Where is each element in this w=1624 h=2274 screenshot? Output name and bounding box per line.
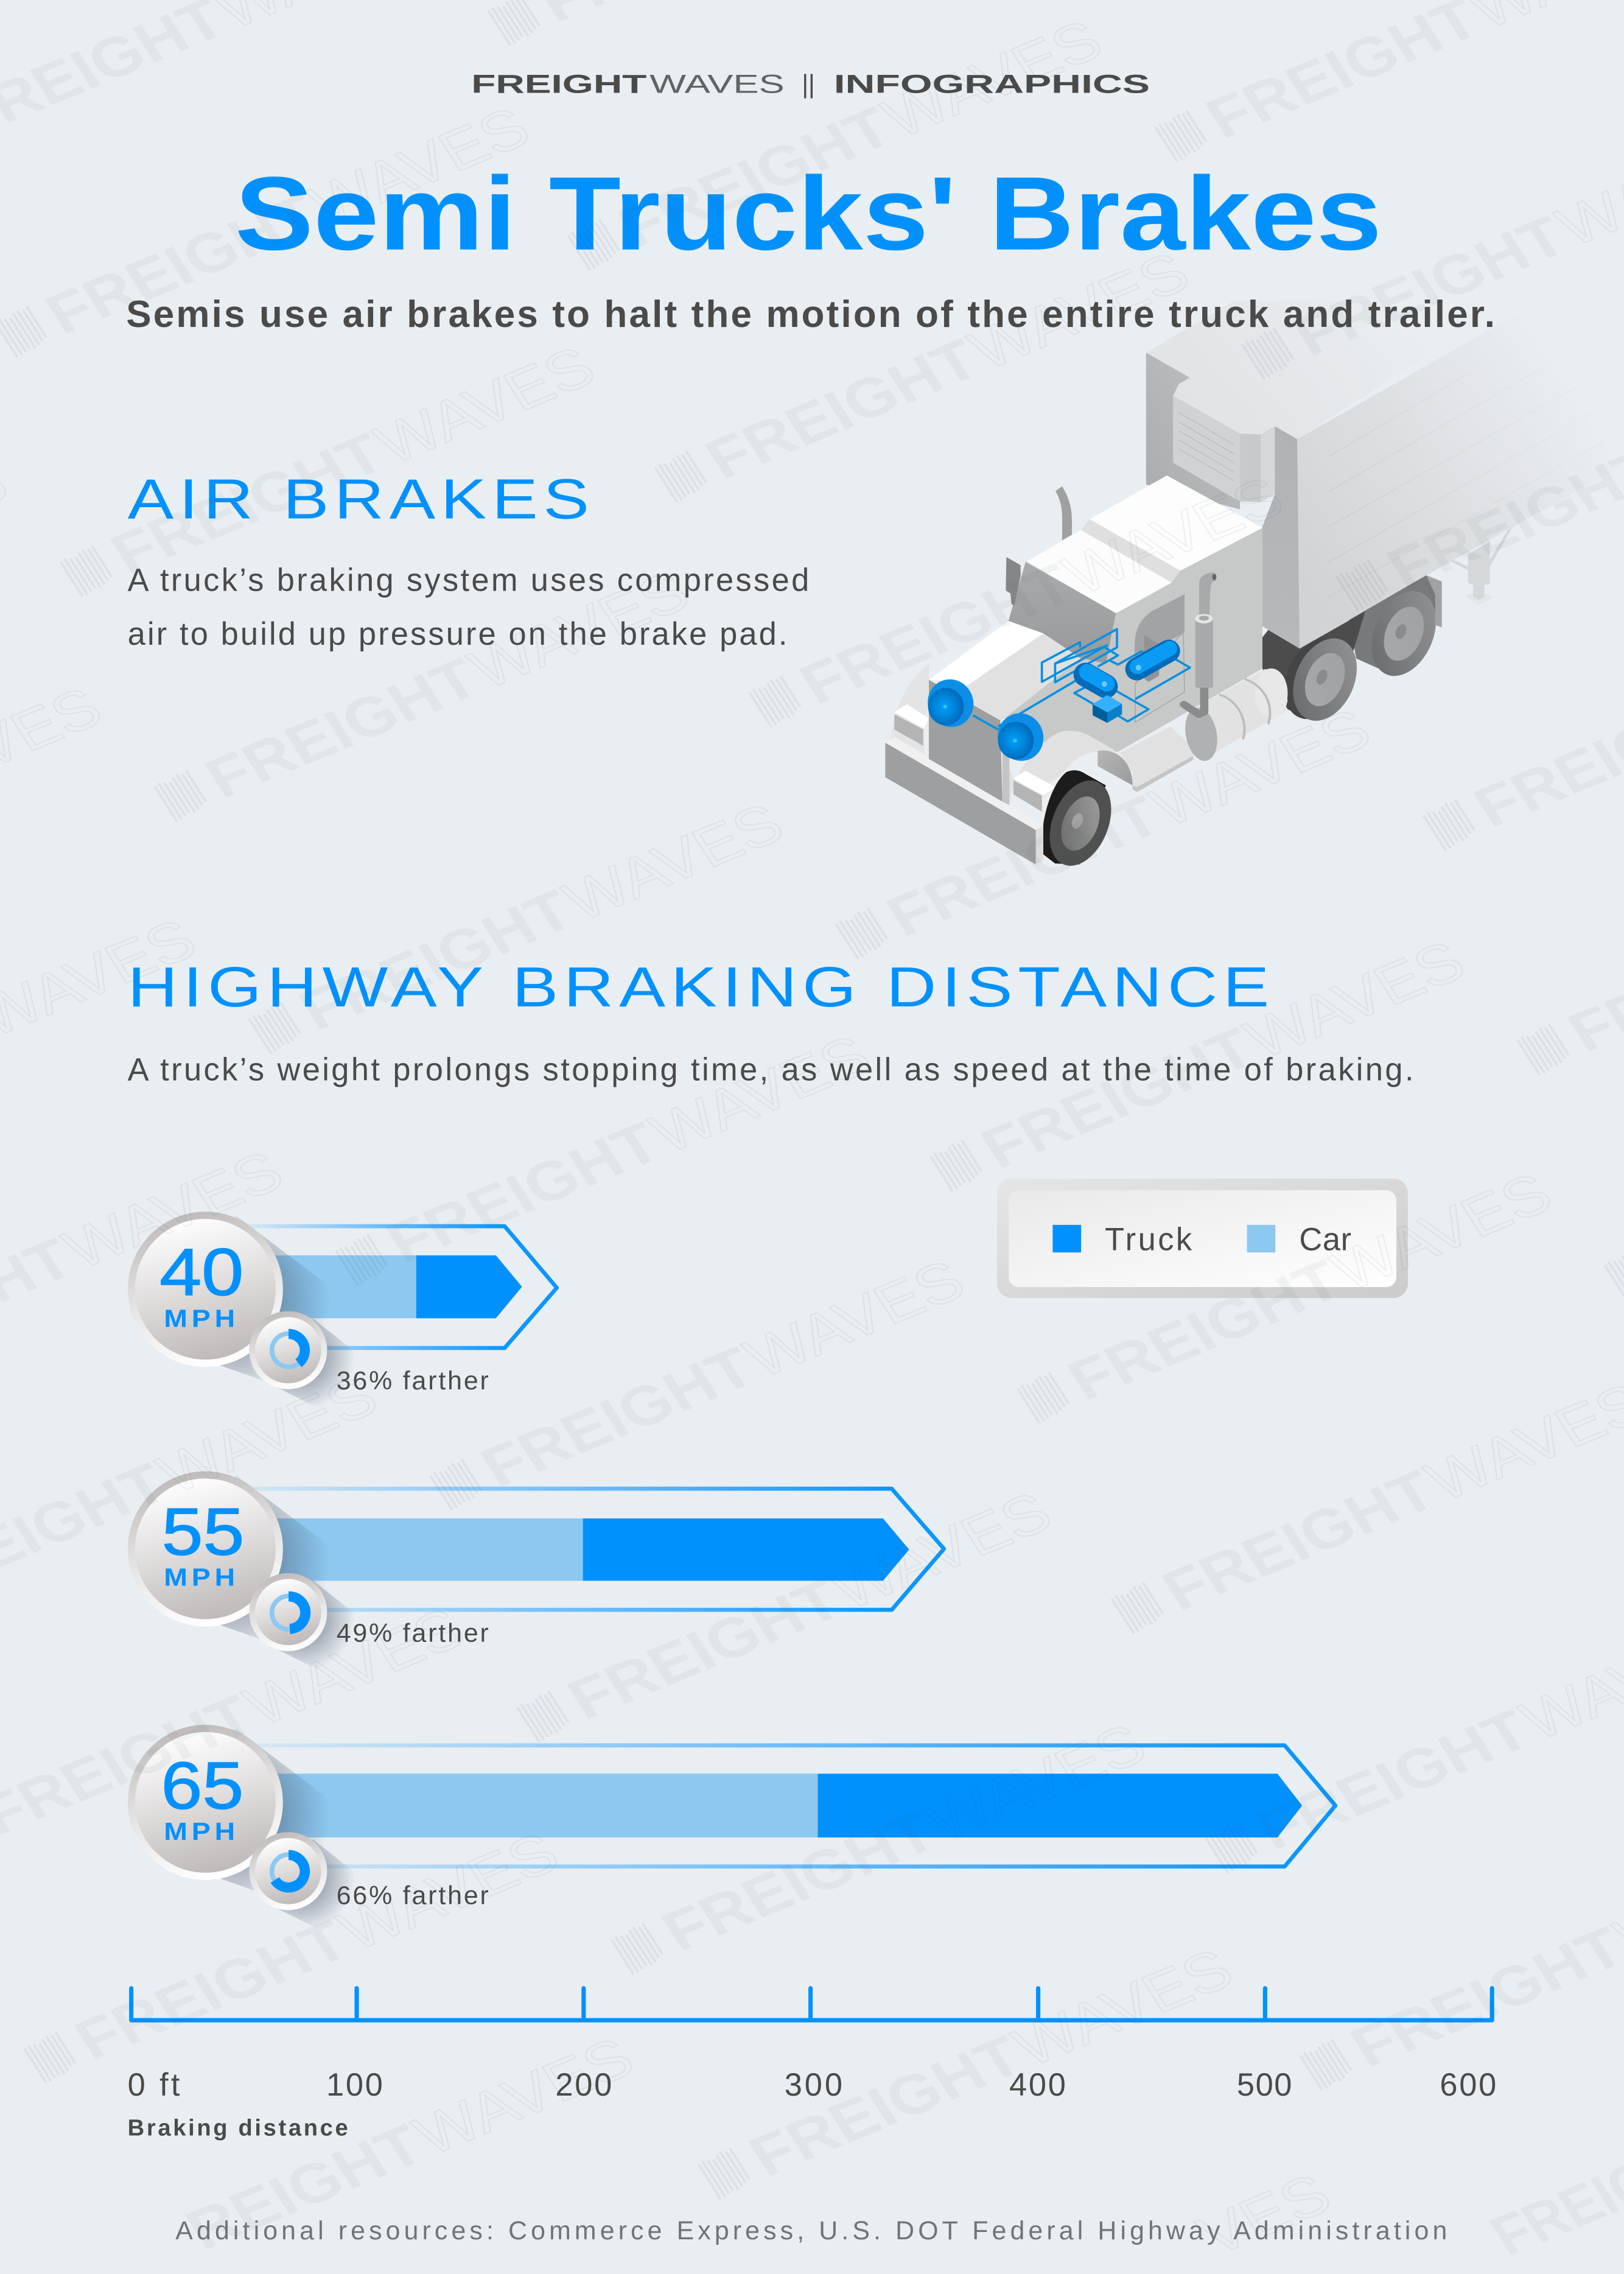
label 40: 36% farther (337, 1366, 489, 1395)
watermark: FREIGHT (1245, 1698, 1542, 1862)
text block: air brakes description: A truck’s braking system uses compressed (128, 563, 809, 598)
axis labels: 200 (555, 2068, 612, 2103)
bar outline 55 (247, 1489, 944, 1610)
gauge 65: MPH (164, 1817, 239, 1845)
trailer roof (1146, 301, 1514, 439)
gauge 40: MPH (164, 1305, 239, 1333)
axis labels: 300 (785, 2068, 842, 2103)
watermark: WAVES (914, 1713, 1157, 1854)
mud flap (1426, 575, 1442, 628)
car bar 65 (261, 1774, 818, 1837)
door window (1135, 594, 1185, 662)
row: 55 mph (128, 1472, 944, 1673)
watermark: FREIGHT (607, 96, 904, 259)
truck front: cab, hood, air system (885, 476, 1262, 875)
exhaust and fuel tank (1181, 573, 1287, 763)
label 55: 49% farther (337, 1618, 489, 1648)
header: brand line: WAVES (649, 69, 785, 99)
brake chambers (921, 673, 1050, 767)
donut 40 (249, 1311, 368, 1411)
door (1135, 632, 1185, 723)
gauge 55 (128, 1472, 343, 1651)
trailer front strip (1262, 426, 1300, 648)
watermark: FREIGHT (970, 1017, 1266, 1180)
watermark: WAVES (1001, 1937, 1244, 2079)
gauge 55: MPH (164, 1563, 239, 1591)
truck bar 55 (583, 1518, 909, 1581)
axis labels: 600 (1440, 2068, 1496, 2103)
watermark: WAVES (552, 791, 795, 933)
watermark: WAVES (1139, 697, 1382, 839)
near rear wheel (1273, 632, 1368, 727)
valve cube (1093, 695, 1122, 723)
header: brand line: || (802, 69, 815, 99)
gauge 65: 65 (161, 1749, 243, 1823)
watermark: FREIGHT (63, 1909, 360, 2072)
air tanks (1085, 648, 1170, 687)
watermark: FREIGHT (288, 879, 584, 1042)
bar outline 40 (247, 1226, 557, 1348)
watermark: WAVES (298, 96, 541, 237)
watermark: FREIGHT (100, 422, 396, 586)
trailer side (1297, 315, 1624, 648)
watermark: WAVES (233, 1596, 476, 1738)
watermark: FREIGHT (1339, 1915, 1624, 2079)
watermark: WAVES (327, 1821, 570, 1963)
axis labels: 500 (1237, 2068, 1292, 2103)
watermark: WAVES (1233, 929, 1477, 1071)
reefer unit (1173, 396, 1275, 502)
watermark: FREIGHT (1281, 205, 1578, 368)
text block: air brakes description (128, 563, 809, 652)
watermark: FREIGHT (375, 1111, 671, 1274)
left exhaust stack (1055, 486, 1072, 541)
far rear wheel (1349, 575, 1447, 683)
axis labels (128, 2068, 1496, 2103)
watermark: FREIGHT (1151, 1459, 1447, 1623)
exhaust pipe (1184, 573, 1216, 714)
watermark: FREIGHT (469, 1336, 766, 1499)
truck illustration (885, 301, 1624, 875)
watermark: FREIGHT (738, 2024, 1034, 2188)
watermark: WAVES (821, 1481, 1063, 1622)
axis labels: 400 (1009, 2068, 1066, 2103)
legend: truck (1052, 1222, 1192, 1257)
landing gear (1449, 524, 1513, 605)
headlight right (1013, 771, 1056, 822)
hood top (967, 634, 1080, 721)
donut 65 (249, 1832, 368, 1932)
gauge 55: 55 (162, 1495, 244, 1570)
title: Semi Trucks' Brakes (235, 156, 1382, 272)
watermark: WAVES (958, 240, 1201, 382)
watermark: WAVES (871, 9, 1114, 150)
truck bar 40 (416, 1255, 522, 1318)
row: 40 mph (128, 1212, 557, 1411)
gauge 40 (128, 1212, 343, 1391)
axis labels: 0 ft (128, 2068, 180, 2103)
subtitle: Semis use air brakes to halt the motion of the entire truck and trailer. (126, 293, 1495, 335)
text block: air brakes description: air to build up pressure on the brake pad. (128, 617, 788, 652)
text block: highway description: A truck’s weight prolongs stopping time, as well as speed at the time of braking. (128, 1053, 1414, 1088)
heading: air brakes: AIR BRAKES (128, 468, 595, 531)
donut 55 (249, 1573, 368, 1673)
car bar 55 (261, 1518, 583, 1581)
watermark: FREIGHT (35, 183, 331, 346)
watermark: FREIGHT (194, 647, 491, 810)
cab roof (1027, 530, 1171, 613)
watermark: VES (1187, 2162, 1343, 2267)
watermark: WAVES (733, 1249, 976, 1390)
sleeper roof (1090, 476, 1262, 570)
watermark: WAVES (1320, 1162, 1563, 1303)
axis line and ticks (131, 1988, 1492, 2020)
bar outline 65 (247, 1746, 1335, 1867)
air lines (973, 629, 1190, 729)
watermark: WAVES (363, 335, 606, 476)
watermark: WAVES (1052, 465, 1295, 606)
gauge 65 (128, 1725, 343, 1904)
left fender (891, 664, 929, 757)
watermark: FREIGHT (788, 552, 1085, 716)
mirror (1006, 557, 1021, 606)
watermark: FREIGHT (1057, 1249, 1353, 1412)
windshield (1009, 562, 1116, 664)
truck rear: trailer and rear wheels (1146, 301, 1624, 727)
row: 65 mph (128, 1725, 1335, 1932)
front wheel (1038, 770, 1123, 875)
legend: car (1247, 1222, 1351, 1257)
watermark: WAVES (146, 1364, 389, 1506)
watermark: REIGHT (175, 2113, 435, 2262)
axis labels: 100 (326, 2068, 383, 2103)
header: brand line (471, 69, 1150, 99)
watermark: WAVES (402, 2026, 645, 2167)
axis: braking distance (128, 1988, 1496, 2141)
watermark: WAVES (52, 1140, 295, 1281)
step and arch (1097, 726, 1193, 792)
watermark: WAVES (639, 1023, 882, 1165)
heading: highway braking distance: HIGHWAY BRAKING DISTANCE (128, 955, 1275, 1019)
watermark: WAVES (458, 560, 701, 701)
headlight left (894, 704, 929, 757)
watermark: FREIGHT (556, 1568, 853, 1731)
fender (1003, 731, 1116, 805)
car bar 40 (261, 1255, 416, 1318)
bumper (885, 737, 1043, 865)
grille (929, 680, 1003, 802)
header: brand line: FREIGHT (471, 69, 646, 99)
truck bar 65 (818, 1774, 1302, 1837)
watermark: FREIGHT (875, 784, 1172, 948)
legend (997, 1179, 1408, 1298)
footer: sources: Additional resources: Commerce Express, U.S. DOT Federal Highway Administration (175, 2216, 1447, 2245)
cab side (1003, 528, 1262, 752)
watermark: FREIGHT (651, 1800, 947, 1963)
watermark: FREIGHT (694, 328, 990, 491)
header: brand line: INFOGRAPHICS (834, 69, 1150, 99)
fuel tank (1181, 669, 1287, 763)
trailer front panel (1146, 353, 1240, 510)
gauge 40: 40 (159, 1235, 243, 1310)
axis title: Braking distance (128, 2116, 348, 2141)
label 65: 66% farther (337, 1881, 489, 1911)
watermark: FREIGHT (1194, 0, 1491, 150)
legend: car: Car (1299, 1222, 1351, 1257)
legend: truck: Truck (1105, 1222, 1192, 1257)
undercarriage (1262, 611, 1365, 713)
